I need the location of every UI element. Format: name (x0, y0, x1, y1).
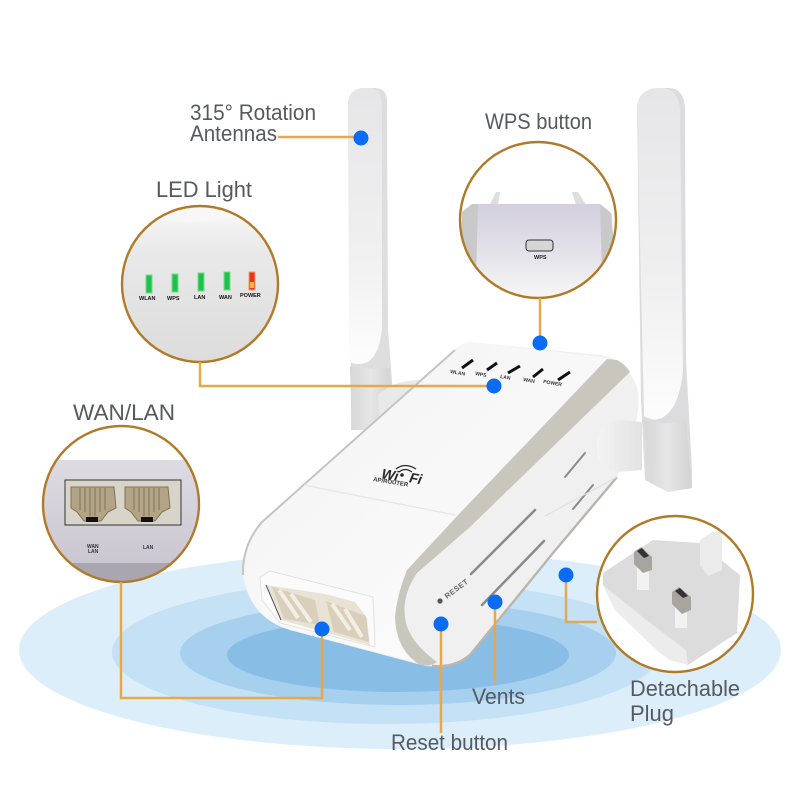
port labels: LAN (88, 549, 99, 555)
callout circle: WAN/LAN (43, 426, 199, 583)
Wi-Fi logo: Fi (407, 470, 425, 487)
label: rotation antennas: 315° Rotation (190, 100, 316, 125)
hinge cylinder: right (597, 420, 642, 472)
vents (471, 453, 617, 605)
Wi-Fi logo: AP/ROUTER (373, 477, 409, 489)
router body (243, 342, 642, 666)
LED slot row: LAN (500, 374, 511, 382)
port labels (87, 544, 153, 553)
seam on top face (304, 485, 455, 515)
port labels: WAN (87, 544, 99, 550)
reset text and hole: RESET (443, 577, 470, 601)
side panel (243, 342, 639, 666)
callout circle: LED light (120, 202, 280, 364)
LED labels: WAN (219, 295, 232, 301)
plug pins (634, 547, 691, 628)
Wi-Fi logo: Wi (379, 466, 402, 484)
left edge highlight (243, 350, 455, 575)
label: vents: Vents (472, 684, 525, 709)
hinge cylinder: left (378, 380, 420, 435)
callout circle: WPS button (460, 142, 616, 298)
ethernet port frame (260, 571, 375, 647)
RJ45 socket: WAN (71, 487, 116, 522)
leader line: WPS (539, 298, 541, 342)
label: antennas: Antennas (190, 121, 277, 146)
label: reset button: Reset button (391, 730, 508, 755)
leader line: vents (494, 604, 496, 684)
label: plug: Plug (630, 701, 674, 726)
LED labels: POWER (240, 293, 261, 299)
UK plug body (603, 540, 740, 665)
LED labels: WPS (167, 296, 180, 302)
WPS button key: WPS (534, 255, 547, 261)
LED labels: LAN (194, 295, 205, 301)
plug earth pin (700, 532, 722, 576)
Wi-Fi logo (373, 466, 425, 489)
left antenna (348, 88, 392, 430)
callout circle: plug (597, 516, 753, 672)
blue marker dots (314, 130, 574, 636)
LED slot row: WLAN (450, 369, 466, 378)
LED indicators (146, 272, 255, 293)
right antenna (637, 88, 692, 492)
leader line: WAN/LAN (121, 582, 322, 698)
LED labels (139, 293, 260, 300)
port labels: LAN (143, 545, 154, 551)
top face (243, 342, 610, 665)
leader line: LED (200, 362, 494, 386)
LED slot row: POWER (543, 379, 563, 388)
signal ripple ellipses (19, 551, 781, 749)
WPS button key (526, 240, 553, 261)
side panel bottom shadow edge (432, 477, 617, 666)
leader line: plug (566, 575, 597, 622)
label: WPS button: WPS button (485, 109, 592, 134)
label: WAN/LAN: WAN/LAN (73, 400, 175, 425)
label: LED light: LED Light (156, 177, 252, 202)
LED slot row (450, 360, 570, 388)
LED slot row: WPS (475, 371, 488, 379)
leader line: antennas (278, 136, 361, 138)
grey band (395, 359, 630, 666)
LED labels: WLAN (139, 296, 156, 302)
label: detachable: Detachable (630, 676, 740, 701)
LED slot row: WAN (523, 377, 536, 385)
leader line: reset (440, 622, 442, 733)
RJ45 socket: LAN (125, 487, 170, 522)
